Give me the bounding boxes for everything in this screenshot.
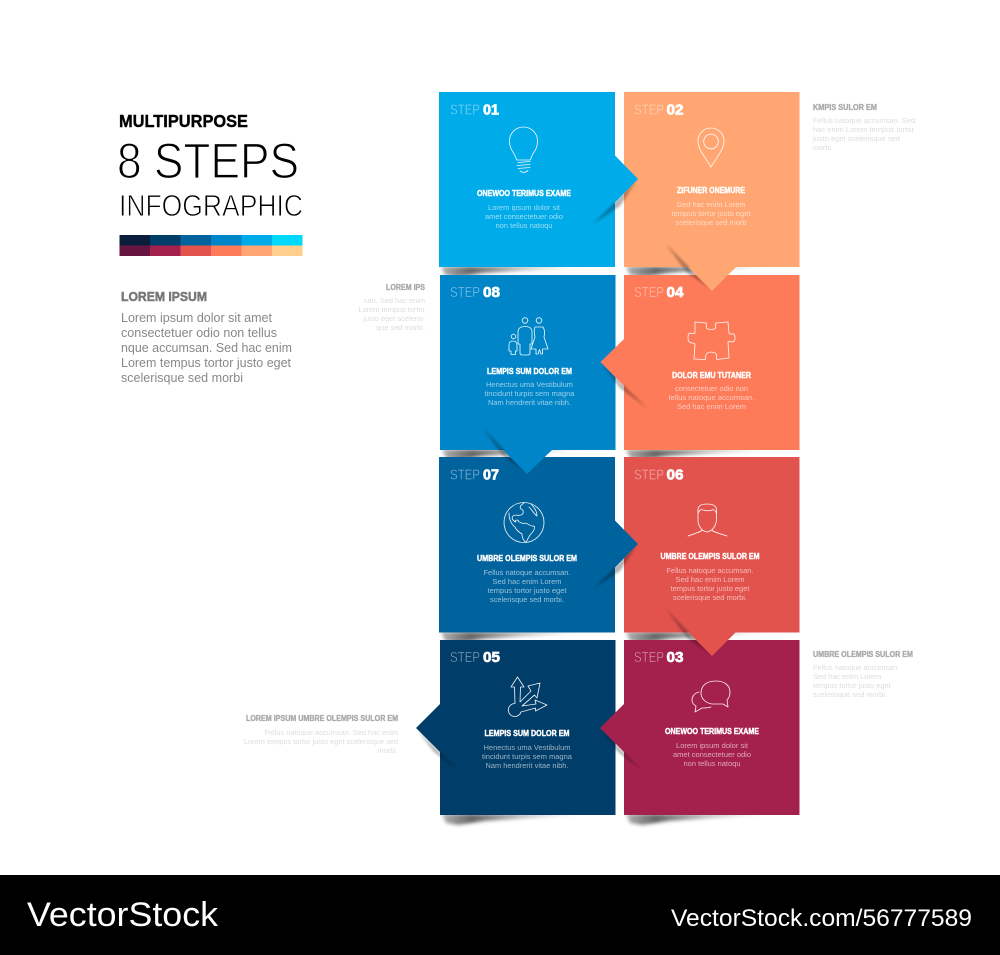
title line: multipurpose: MULTIPURPOSE — [119, 111, 248, 131]
step label 06: 06 — [666, 468, 684, 484]
step label 02: STEP — [634, 102, 664, 118]
step 03 text: non tellus natoqu — [684, 759, 740, 768]
footer band — [0, 875, 1000, 955]
step 08 text: Nam hendrerit vitae nibh. — [488, 398, 571, 407]
icon: puzzle piece — [688, 322, 735, 360]
footer url: VectorStock.com/56777589 — [671, 905, 972, 932]
arrow: step 04 pointing left — [600, 339, 624, 386]
step 04 text: tellus natoque accumsan. — [668, 393, 754, 402]
step 08 text: tincidunt turpis sem magna — [484, 389, 575, 398]
side note: lorem ips — [358, 283, 426, 332]
arrow: step 05 pointing left — [416, 704, 440, 752]
icon: family — [509, 318, 548, 355]
step 01 text: non tellus natoqu — [496, 221, 552, 230]
side note: kmpis sulor em — [812, 103, 915, 152]
intro heading: LOREM IPSUM — [121, 290, 207, 304]
step 07 text: UMBRE OLEMPIS SULOR EM — [477, 554, 577, 563]
step 06 text: Sed hac enim Lorem — [676, 575, 744, 584]
step label 02: 02 — [666, 102, 684, 118]
side note: lorem ipsum umbre olempis sulor em: morbi. — [377, 746, 398, 755]
arrow: step 01 pointing right — [614, 155, 638, 203]
step 06 text: UMBRE OLEMPIS SULOR EM — [660, 552, 760, 561]
step label 01: STEP — [450, 102, 480, 118]
panel: step 07 — [439, 457, 638, 643]
panel: step 03 — [600, 640, 800, 825]
step 04 text: consectetuer odio non — [675, 384, 748, 393]
intro paragraph: consectetuer odio non tellus — [121, 326, 277, 340]
step 02 text: ZIFUNER ONEMURE — [677, 186, 746, 195]
side note: umbre olempis sulor em: scelerisque sed morbi. — [813, 690, 887, 699]
step 05 text: Henectus uma Vestibulum — [484, 743, 570, 752]
step label 03: 03 — [666, 650, 684, 666]
step label 06: STEP — [634, 466, 664, 484]
intro paragraph: Lorem tempus tortor justo eget — [121, 356, 292, 370]
icon: location pin — [698, 128, 724, 167]
step label 08: STEP — [450, 284, 480, 301]
side note: kmpis sulor em: morbi. — [813, 143, 833, 152]
title line: infographic: INFOGRAPHIC — [119, 188, 303, 223]
step 04 text: DOLOR EMU TUTANER — [672, 371, 751, 380]
step 07 text: scelerisque sed morbi. — [490, 595, 564, 604]
side note: lorem ipsum umbre olempis sulor em: Lorem tempus tortor justo eget scelerisque sed — [244, 737, 398, 746]
step label 04: STEP — [634, 284, 664, 301]
step 08 text — [484, 367, 575, 407]
side note: lorem ips: justo eget sceleris- — [362, 314, 426, 323]
arrow: step 02 pointing down — [688, 267, 736, 291]
icon: head and shoulders — [688, 504, 727, 536]
step 02 text: tempus tortor justo eget — [672, 209, 751, 218]
step 05 text — [482, 729, 573, 770]
step 03 text — [665, 727, 760, 768]
panel: step 08 — [440, 275, 616, 474]
icon: speech bubbles — [692, 681, 730, 712]
step label 01: 01 — [483, 102, 499, 118]
panel: step 05 — [416, 640, 616, 825]
step 05 text: LEMPIS SUM DOLOR EM — [484, 729, 570, 738]
footer logo text: VectorStock — [27, 896, 219, 934]
title block — [117, 111, 303, 223]
step 06 text — [660, 552, 760, 602]
step label 08: 08 — [483, 285, 500, 301]
step 02 text — [672, 186, 751, 227]
side note: kmpis sulor em: justo eget scelerisque sed — [812, 134, 900, 143]
intro paragraph: Lorem ipsum dolor sit amet — [121, 311, 273, 325]
step 03 text: Lorem ipsum dolor sit — [676, 741, 749, 750]
step 02 text: Ged hac enim Lorem — [676, 200, 746, 209]
arrow: step 03 pointing left — [600, 704, 624, 752]
step 08 text: LEMPIS SUM DOLOR EM — [487, 367, 572, 376]
step 03 text: amet consectetuer odio — [673, 750, 751, 759]
panel: step 06 — [624, 457, 800, 656]
panel: step 01 — [439, 92, 638, 277]
side note: umbre olempis sulor em: Sed hac enim Lorem — [813, 672, 881, 681]
arrow: step 07 pointing right — [614, 520, 638, 568]
icon: light bulb — [510, 127, 538, 172]
step 07 text: Fellus natoque accumsan. — [484, 568, 570, 577]
step 04 text — [668, 371, 754, 411]
side note: lorem ipsum umbre olempis sulor em: Fellus natoque accumsan. Sed hac enim — [264, 728, 398, 737]
side note: umbre olempis sulor em: UMBRE OLEMPIS SULOR EM — [813, 650, 913, 659]
side note: lorem ips: Lorem tempus tortor — [358, 305, 426, 314]
icon: branching arrows — [508, 677, 547, 716]
intro paragraph: scelerisque sed morbi — [121, 371, 243, 385]
colour palette bar — [120, 235, 302, 256]
step label 05: STEP — [450, 649, 480, 666]
icon: globe — [504, 502, 544, 542]
side note: lorem ips: LOREM IPS — [386, 283, 426, 292]
title line: 8 steps: 8 STEPS — [117, 133, 299, 189]
side note: lorem ipsum umbre olempis sulor em: LOREM IPSUM UMBRE OLEMPIS SULOR EM — [246, 714, 398, 723]
step 04 text: Sed hac enim Lorem — [677, 402, 746, 411]
panel: step 02 — [624, 92, 800, 291]
step label 04: 04 — [666, 285, 684, 301]
step 06 text: tempus tortor justo eget — [670, 584, 750, 593]
step 05 text: tincidunt turpis sem magna — [482, 752, 573, 761]
side note: kmpis sulor em: hac enim Lorem tempus tortor — [813, 125, 915, 134]
step label 05: 05 — [483, 650, 500, 666]
step label 07: STEP — [450, 466, 480, 484]
step 02 text: scelerisque sed morb — [676, 218, 746, 227]
side note: kmpis sulor em: Fellus natoque accumsan. Sed — [813, 116, 915, 125]
step 01 text: ONEWOO TERIMUS EXAME — [477, 189, 572, 198]
intro paragraph: nque accumsan. Sed hac enim — [121, 341, 292, 355]
step 07 text: tempus tortor justo eget — [488, 586, 567, 595]
step 06 text: Fellus natoque accumsan. — [666, 566, 754, 575]
side note: kmpis sulor em: KMPIS SULOR EM — [813, 103, 877, 112]
side note: umbre olempis sulor em — [813, 650, 913, 699]
step 07 text — [477, 554, 577, 604]
intro paragraph — [121, 311, 292, 385]
arrow: step 08 pointing down — [503, 450, 552, 474]
side note: lorem ips: que sed morbi. — [376, 323, 425, 332]
step 01 text: Lorem ipsum dolor sit — [488, 203, 561, 212]
step 06 text: scelerisque sed morbi. — [673, 593, 747, 602]
step 01 text: amet consectetuer odio — [485, 212, 563, 221]
arrow: step 06 pointing down — [688, 632, 736, 656]
step label 07: 07 — [483, 468, 499, 484]
side note: umbre olempis sulor em: Fellus natoque accumsan. — [813, 663, 899, 672]
side note: lorem ipsum umbre olempis sulor em — [244, 714, 398, 755]
step 08 text: Henectus uma Vestibulum — [486, 380, 573, 389]
side note: umbre olempis sulor em: tempus tortor justo eget — [813, 681, 891, 690]
step 07 text: Sed hac enim Lorem — [492, 577, 562, 586]
step 01 text — [477, 189, 572, 230]
step label 03: STEP — [634, 649, 664, 666]
side note: lorem ips: san. Sed hac enim — [364, 296, 425, 305]
intro text block — [121, 290, 292, 385]
step 03 text: ONEWOO TERIMUS EXAME — [665, 727, 760, 736]
step 05 text: Nam hendrerit vitae nibh. — [486, 761, 568, 770]
panel: step 04 — [600, 275, 800, 460]
